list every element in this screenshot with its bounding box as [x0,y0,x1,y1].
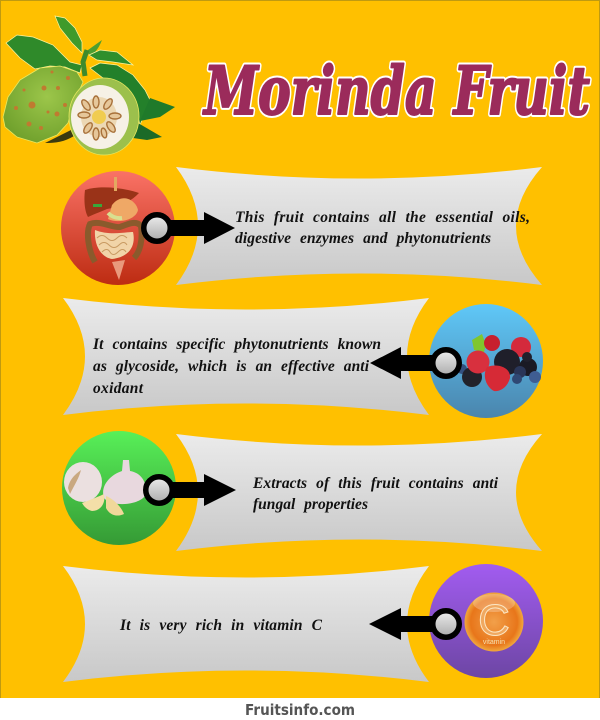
circle: vitamin C: C [478,596,510,645]
circle: berries [429,304,543,418]
leaf right [90,63,150,125]
leaf left [6,35,82,73]
text: It contains specific phytonutrients known [92,336,381,353]
half fruit [69,78,139,155]
panel: glycoside [63,298,543,418]
fruit shadow [45,128,75,143]
text: digestive enzymes and phytonutrients [235,230,491,247]
text [235,209,530,247]
banner [176,434,542,551]
leaf top [55,16,82,53]
circle: vitamin C [429,564,543,678]
text [252,475,499,513]
arrow [144,212,235,244]
text: Extracts of this fruit contains anti [252,475,499,492]
leaf small [88,40,102,56]
text: oxidant [93,380,144,397]
text: fungal properties [253,496,368,513]
circle: garlic [62,431,176,545]
leaf mid [89,50,133,65]
text: This fruit contains all the essential oils, [235,209,530,226]
arrow [370,347,459,379]
text: as glycoside, which is an effective anti [93,358,370,375]
banner [63,566,429,682]
panel: anti fungal [62,431,542,551]
banner [63,298,429,415]
circle: digestive system [61,171,175,285]
whole fruit [3,66,83,143]
arrow [369,608,459,640]
text: It is very rich in vitamin C [119,617,323,634]
stem [83,50,87,76]
circle: vitamin C: vitamin [483,639,505,646]
banner [176,167,542,285]
icon: morinda fruit [3,16,175,155]
panel: essential oils [61,167,542,285]
footer: Fruitsinfo.com [245,701,355,719]
panel: vitamin C [63,564,543,682]
leaf bottom [133,123,162,140]
text [92,336,381,397]
arrow [146,474,236,506]
leaf far right [140,98,175,121]
